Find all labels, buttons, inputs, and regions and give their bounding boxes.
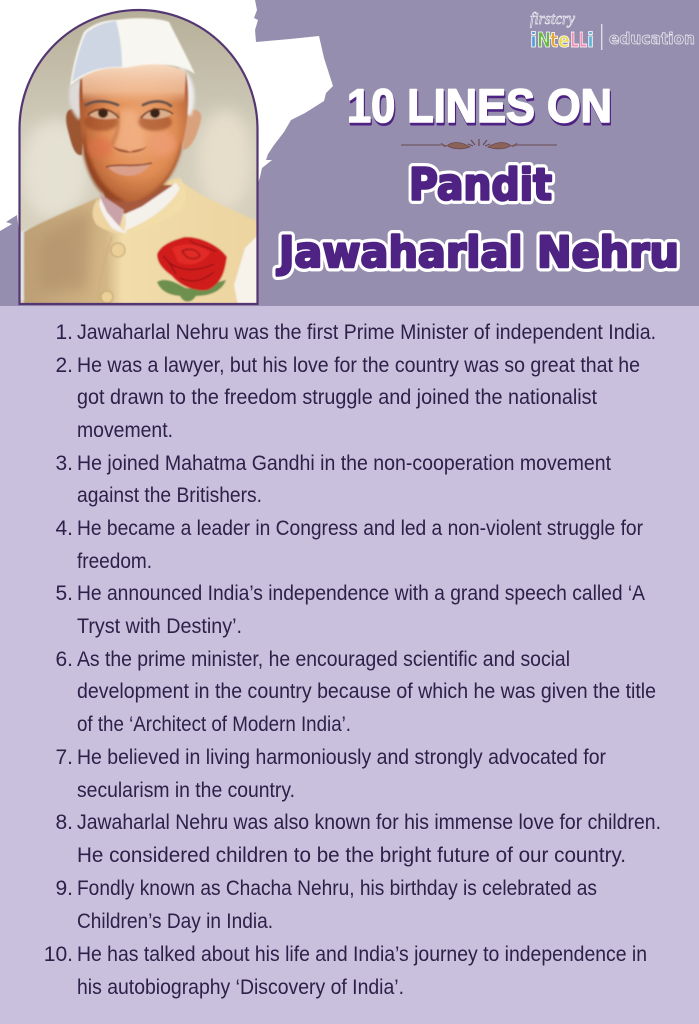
portrait: Jawaharlal Nehru in arched frame <box>19 8 259 306</box>
line 6: development in the country because of which he was given the title <box>77 680 656 703</box>
line 5: 5. <box>55 582 73 605</box>
line 7 <box>55 746 606 802</box>
line 5: He announced India’s independence with a grand speech called ‘A <box>77 582 645 605</box>
buttons <box>111 243 125 257</box>
body panel <box>0 306 699 1024</box>
title: Jawaharlal Nehru: Jawaharlal Nehru <box>276 228 679 278</box>
face shading <box>83 128 125 201</box>
logo intelli wordmark: e <box>558 28 570 52</box>
mouth <box>108 164 150 176</box>
line 9 <box>55 877 597 933</box>
line 6: 6. <box>55 648 73 671</box>
line 3: against the Britishers. <box>77 484 262 507</box>
placket edge <box>108 236 112 249</box>
line 7: 7. <box>55 746 73 769</box>
shirt right <box>234 235 258 306</box>
header background <box>0 0 699 306</box>
line 9: 9. <box>55 877 73 900</box>
line 8 <box>55 811 661 867</box>
line 4: He became a leader in Congress and led a non-violent struggle for <box>77 517 643 540</box>
line 3: 3. <box>55 452 73 475</box>
cap <box>70 18 195 86</box>
line 3: He joined Mahatma Gandhi in the non-cooperation movement <box>77 452 611 475</box>
logo intelli wordmark <box>530 28 594 52</box>
logo intelli wordmark: N <box>537 28 551 52</box>
line 10: He has talked about his life and India’s journey to independence in <box>77 943 647 966</box>
left shirt sliver <box>20 229 29 300</box>
line 6: of the ‘Architect of Modern India’. <box>77 713 351 736</box>
logo: firstcry intelli education <box>530 9 695 52</box>
line 1: 1. <box>55 321 73 344</box>
line 8: He considered children to be the bright future of our country. <box>77 844 626 867</box>
white brush shape <box>0 0 333 240</box>
logo intelli wordmark: i <box>587 28 594 52</box>
logo education wordmark: education <box>609 29 695 48</box>
face <box>79 64 188 202</box>
jacket collar <box>126 176 186 235</box>
line 4: freedom. <box>77 550 152 573</box>
line 7: secularism in the country. <box>77 779 295 802</box>
title: Pandit: Pandit <box>409 160 552 210</box>
line 2: He was a lawyer, but his love for the country was so great that he <box>77 354 640 377</box>
rose <box>157 237 227 302</box>
line 4: 4. <box>55 517 73 540</box>
eyes <box>89 110 118 119</box>
eyebrows <box>86 101 171 106</box>
line 5: Tryst with Destiny’. <box>77 615 242 638</box>
white shirt collar <box>98 183 179 234</box>
line 9: Children’s Day in India. <box>77 910 273 933</box>
line 6: As the prime minister, he encouraged scientific and social <box>77 648 570 671</box>
ornament divider <box>401 139 557 149</box>
jacket <box>24 178 258 306</box>
line 3 <box>55 452 611 507</box>
white hair sides <box>68 78 82 122</box>
line 6 <box>55 648 656 736</box>
arch frame <box>20 10 258 304</box>
line 5 <box>55 582 645 638</box>
line 7: He believed in living harmoniously and strongly advocated for <box>77 746 606 769</box>
line 2: 2. <box>55 354 73 377</box>
logo firstcry wordmark: firstcry <box>530 9 575 28</box>
title: Jawaharlal Nehru: Jawaharlal Nehru <box>276 228 679 278</box>
title: Pandit: Pandit <box>409 160 552 210</box>
line 2: movement. <box>77 419 173 442</box>
line 10 <box>44 943 647 999</box>
nose <box>113 146 147 153</box>
ears <box>66 109 84 155</box>
line 10: 10. <box>44 943 73 966</box>
logo intelli wordmark: t <box>550 28 558 52</box>
line 4 <box>55 517 643 573</box>
line 8: Jawaharlal Nehru was also known for his immense love for children. <box>77 811 661 834</box>
logo intelli wordmark: L <box>579 28 587 52</box>
neck <box>102 185 172 214</box>
logo intelli wordmark: i <box>530 28 537 52</box>
line 8: 8. <box>55 811 73 834</box>
line 9: Fondly known as Chacha Nehru, his birthday is celebrated as <box>77 877 597 900</box>
logo intelli wordmark: L <box>570 28 579 52</box>
title: 10 LINES ON: 10 LINES ON <box>347 79 612 132</box>
line 2: got drawn to the freedom struggle and joined the nationalist <box>77 386 597 409</box>
title: 10 LINES ON: 10 LINES ON <box>348 82 613 134</box>
line 1: Jawaharlal Nehru was the first Prime Minister of independent India. <box>77 321 656 344</box>
line 10: his autobiography ‘Discovery of India’. <box>77 976 404 999</box>
numbered list of ten lines <box>44 321 661 999</box>
line 2 <box>55 354 640 442</box>
